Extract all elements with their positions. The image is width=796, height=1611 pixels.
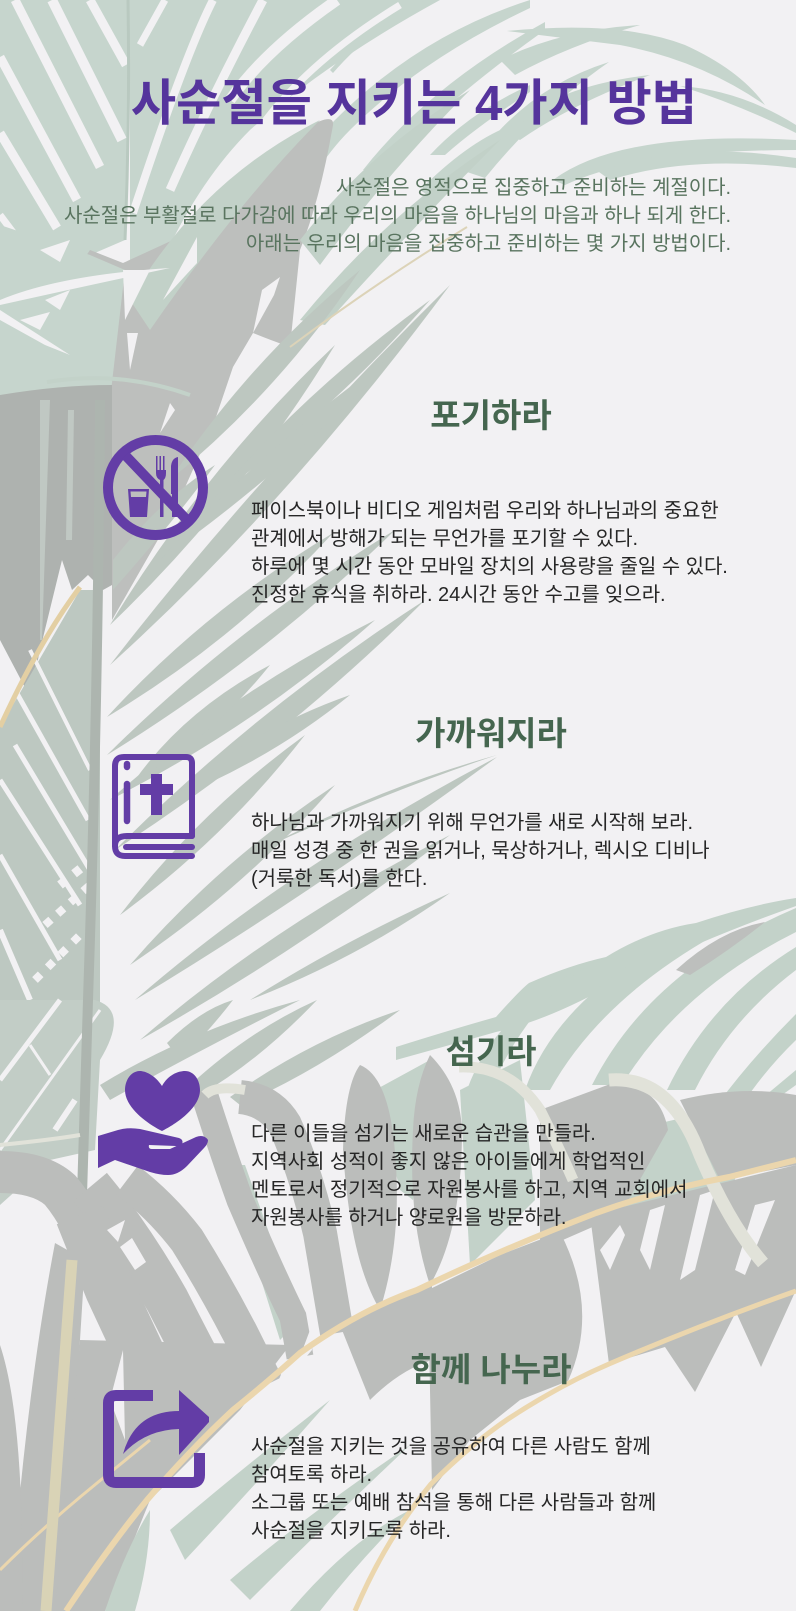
intro text: 사순절은 부활절로 다가감에 따라 우리의 마음을 하나님의 마음과 하나 되게 한다.	[64, 205, 731, 227]
body text: 가까워지라: (거룩한 독서)를 한다.	[251, 868, 427, 890]
body text: 포기하라: 하루에 몇 시간 동안 모바일 장치의 사용량을 줄일 수 있다.	[251, 556, 728, 578]
body text: 포기하라: 페이스북이나 비디오 게임처럼 우리와 하나님과의 중요한	[251, 500, 719, 522]
lower dark blades	[0, 1090, 337, 1440]
middle fronds	[100, 270, 497, 1105]
body text: 포기하라: 진정한 휴식을 취하라. 24시간 동안 수고를 잊으라.	[251, 584, 666, 606]
dark columns	[0, 385, 112, 697]
heading: 포기하라: 포기하라	[430, 397, 552, 434]
body text: 포기하라: 관계에서 방해가 되는 무언가를 포기할 수 있다.	[251, 528, 638, 550]
body text: 섬기라: 자원봉사를 하거나 양로원을 방문하라.	[251, 1207, 566, 1229]
intro text: 사순절은 영적으로 집중하고 준비하는 계절이다.	[336, 177, 731, 199]
body text: 함께 나누라	[251, 1436, 656, 1542]
body text: 가까워지라: 하나님과 가까워지기 위해 무언가를 새로 시작해 보라.	[251, 812, 693, 834]
yellow stems	[0, 1160, 796, 1611]
heading: 가까워지라: 가까워지라	[415, 715, 567, 752]
lower sage frond	[225, 898, 796, 1340]
central dark mass	[0, 119, 333, 620]
body text: 함께 나누라: 사순절을 지키는 것을 공유하여 다른 사람도 함께	[251, 1436, 651, 1458]
body text: 가까워지라: 매일 성경 중 한 권을 읽거나, 묵상하거나, 렉시오 디비나	[251, 840, 709, 862]
body text: 섬기라: 다른 이들을 섬기는 새로운 습관을 만들라.	[251, 1123, 596, 1145]
body text: 섬기라	[251, 1123, 687, 1229]
body text: 함께 나누라: 사순절을 지키도록 하라.	[251, 1520, 451, 1542]
intro text	[64, 177, 731, 255]
title: 사순절을 지키는 4가지 방법	[131, 76, 697, 131]
heading: 섬기라: 섬기라	[445, 1033, 537, 1070]
body text: 섬기라: 멘토로서 정기적으로 자원봉사를 하고, 지역 교회에서	[251, 1179, 687, 1201]
body text: 가까워지라	[251, 812, 709, 890]
body text: 섬기라: 지역사회 성적이 좋지 않은 아이들에게 학업적인	[251, 1151, 645, 1173]
intro text: 아래는 우리의 마음을 집중하고 준비하는 몇 가지 방법이다.	[246, 233, 731, 255]
heading: 함께 나누라: 함께 나누라	[411, 1351, 571, 1388]
body text: 함께 나누라: 소그룹 또는 예배 참석을 통해 다른 사람들과 함께	[251, 1492, 656, 1514]
body text: 포기하라	[251, 500, 728, 606]
body text: 함께 나누라: 참여토록 하라.	[251, 1464, 372, 1486]
